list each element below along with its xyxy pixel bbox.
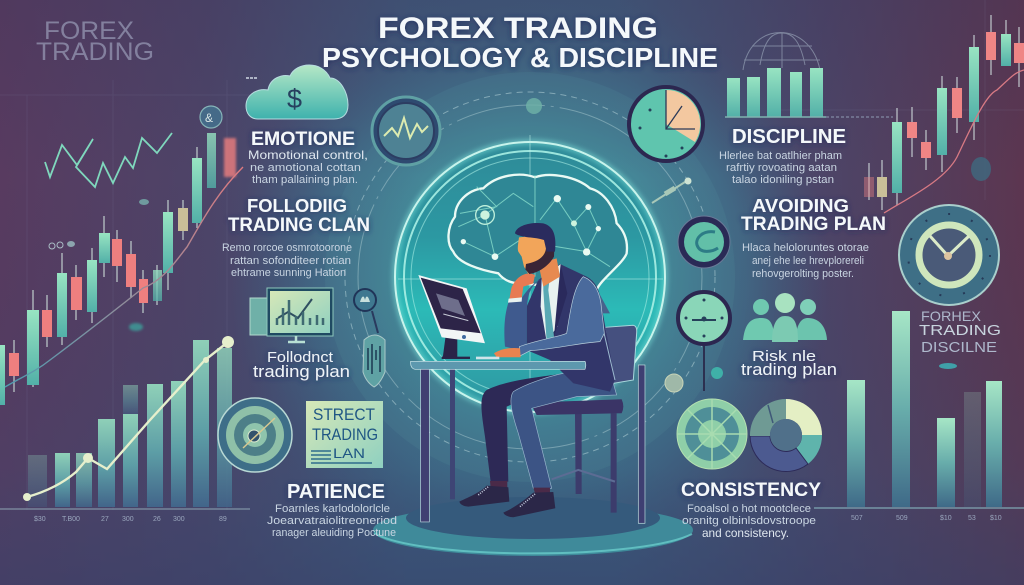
left axis labels: 26 — [153, 516, 161, 523]
watermark: forex trading: TRADING — [36, 38, 154, 66]
title: FOREX TRADING — [378, 12, 658, 45]
text: emotione: Momotional control, — [248, 148, 368, 162]
right axis labels: 53 — [968, 515, 976, 522]
central figure — [411, 175, 645, 523]
near leg — [511, 373, 617, 488]
right axis labels: 509 — [896, 515, 908, 522]
panel: strict trading plan: LAN — [333, 445, 365, 461]
title: PSYCHOLOGY & DISCIPLINE — [322, 42, 718, 73]
left axis labels: 300 — [122, 516, 134, 523]
watermark: forex trading discipline: TRADING — [919, 322, 1001, 339]
halo rings and arcs — [325, 72, 735, 482]
icon: wall clock with pendant — [665, 292, 730, 392]
icon: green coin — [678, 216, 730, 268]
left bar chart — [0, 340, 250, 523]
panel: strict trading plan: TRADING — [312, 425, 378, 444]
brain — [448, 175, 627, 290]
right candlestick chart — [864, 15, 1024, 213]
text: follodnct trading plan: Follodnct — [267, 349, 334, 366]
text: follodnct trading plan — [253, 349, 350, 381]
text: follodnct trading plan: trading plan — [253, 362, 350, 381]
left axis labels: T.B00 — [62, 516, 80, 523]
text: discipline: Hlerlee bat oatlhier pham — [719, 150, 842, 162]
donut chart — [750, 399, 822, 472]
right axis labels: $10 — [940, 515, 952, 522]
text: consistency: Fooalsol o hot mootclece — [687, 503, 811, 515]
text: following trading plan: TRADING CLAN — [228, 215, 370, 236]
text: avoiding trading plan: rehovgerolting poster. — [752, 268, 854, 280]
desk — [411, 361, 586, 522]
right axis labels: 507 — [851, 515, 863, 522]
icon: trading monitor — [250, 288, 333, 342]
watermark: forex trading — [36, 17, 154, 66]
torso — [527, 264, 615, 392]
shoes — [459, 481, 555, 517]
text: following trading plan: rattan sofonditeer rotian — [230, 255, 351, 267]
icon: globe wheel — [677, 399, 747, 469]
watermark: forex trading discipline — [919, 308, 1001, 369]
left trend line — [5, 167, 243, 387]
text: avoiding trading plan — [741, 196, 886, 280]
text: consistency: oranitg olbinlsdovstroope — [682, 515, 816, 527]
icon: big gauge — [899, 205, 999, 305]
growth line — [23, 336, 234, 501]
text: consistency: CONSISTENCY — [681, 480, 821, 501]
left axis labels — [34, 516, 227, 523]
icon: pulse coin — [372, 97, 440, 165]
icon: cloud with dollar: $ — [287, 84, 302, 114]
text: consistency — [681, 480, 821, 540]
text: avoiding trading plan: Hlaca heloloruntes otorae — [742, 242, 869, 254]
computer monitor — [418, 275, 499, 359]
text: emotione: ne amotional cottan — [250, 162, 361, 174]
icon: globe with bars — [725, 32, 893, 117]
small chart icons — [49, 106, 222, 331]
watermark: forex trading discipline: DISCILNE — [921, 339, 997, 356]
text: avoiding trading plan: TRADING PLAN — [741, 214, 886, 235]
text: risk trading plan: Risk nle — [752, 348, 816, 365]
sleeve and hands — [494, 273, 604, 357]
text: avoiding trading plan: AVOIDING — [752, 196, 849, 216]
text: patience: ranager aleuiding Poctune — [272, 527, 396, 539]
zigzag line — [45, 133, 172, 187]
icon: connector ornament — [652, 178, 692, 203]
icon: target dial — [218, 398, 292, 472]
text: following trading plan — [222, 196, 370, 279]
left axis labels: $30 — [34, 516, 46, 523]
icon: people — [743, 293, 827, 342]
text: consistency: and consistency. — [702, 526, 789, 540]
text: following trading plan: ehtrame sunning Hation — [231, 267, 346, 279]
text: following trading plan: FOLLODIIG — [247, 196, 347, 216]
watermark: forex trading: FOREX — [44, 17, 134, 45]
right bar chart — [814, 311, 1024, 522]
desk back leg — [450, 369, 455, 499]
head — [515, 223, 560, 287]
title — [322, 12, 718, 73]
icon: knob and shield — [354, 289, 385, 387]
text: patience: PATIENCE — [287, 481, 385, 503]
text: risk trading plan: trading plan — [741, 360, 837, 379]
text: patience: Joearvatraiolitreoneriod — [267, 515, 397, 527]
text: avoiding trading plan: anej ehe lee hrevplorereli — [752, 255, 864, 267]
text: patience: Foarnles karlodolorlcle — [275, 503, 390, 515]
icon: cloud with dollar — [246, 65, 348, 119]
icon: pie clock — [629, 87, 703, 161]
small chart icons: & — [205, 111, 213, 125]
watermark: forex trading discipline: FORHEX — [921, 308, 982, 324]
floor platform — [373, 497, 693, 556]
far leg — [481, 372, 583, 482]
text: patience — [267, 481, 397, 539]
text: discipline: talao idoniling pstan — [732, 174, 834, 186]
text: emotione: tham pallaining plan. — [252, 174, 358, 186]
left axis labels: 89 — [219, 516, 227, 523]
right axis labels: $10 — [990, 515, 1002, 522]
left axis labels: 27 — [101, 516, 109, 523]
thinking arm — [504, 279, 541, 350]
right axis labels — [851, 515, 1002, 522]
text: risk trading plan — [741, 348, 837, 379]
left axis labels: 300 — [173, 516, 185, 523]
left candlestick chart — [0, 133, 236, 405]
text: discipline: DISCIPLINE — [732, 126, 846, 148]
panel: strict trading plan — [306, 401, 383, 468]
text: emotione: EMOTIONE — [251, 129, 355, 150]
text: emotione — [248, 129, 368, 186]
text: following trading plan: Remo rorcoe osmrotoorone — [222, 242, 352, 254]
text: discipline: rafrtiy rovoating aatan — [726, 162, 837, 174]
text: discipline — [719, 126, 846, 186]
panel: strict trading plan: STRECT — [313, 405, 375, 424]
chair — [530, 325, 645, 523]
